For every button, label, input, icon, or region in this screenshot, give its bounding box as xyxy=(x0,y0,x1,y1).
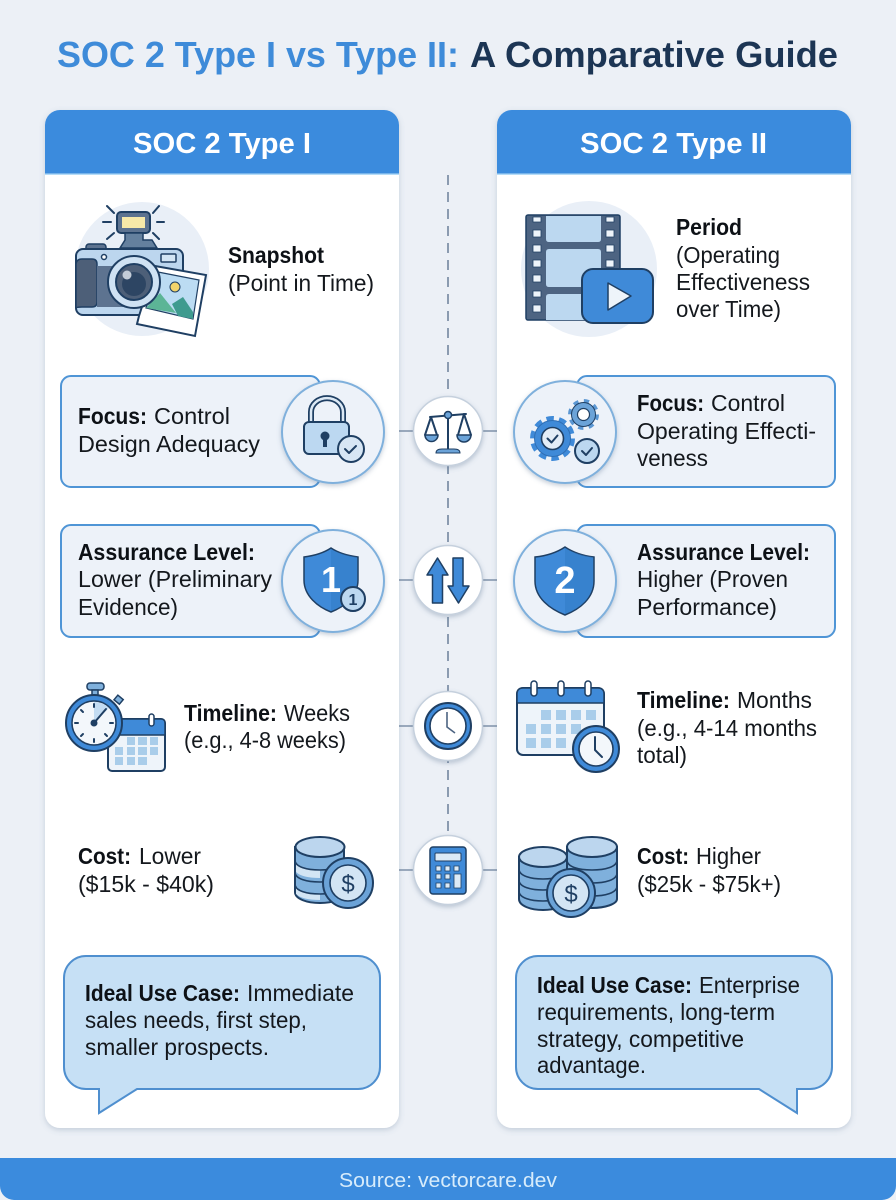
text: period: over Time) xyxy=(676,296,781,322)
footer bar: Source: vectorcare.dev xyxy=(339,1170,557,1192)
callout: ideal use case Type II: requirements, long-term xyxy=(537,999,775,1025)
title: A Comparative Guide xyxy=(470,34,838,75)
icon: coin stack: $ xyxy=(341,871,355,898)
text: timeline Type I: Timeline: xyxy=(184,700,277,726)
text: cost Type I: Cost: xyxy=(78,843,131,869)
callout: ideal use case Type II: Ideal Use Case: xyxy=(537,972,692,998)
card: assurance Type II: Performance) xyxy=(637,594,777,620)
card: assurance Type I: Evidence) xyxy=(78,594,178,620)
card: assurance Type I xyxy=(61,525,384,637)
text: timeline Type I xyxy=(184,700,350,753)
center icon: clock xyxy=(414,692,482,760)
text: cost Type II xyxy=(637,843,781,897)
text: cost Type II: ($25k - $75k+) xyxy=(637,871,781,897)
card: assurance Type I: Assurance Level: xyxy=(78,539,255,565)
callout: ideal use case Type I: smaller prospects. xyxy=(85,1034,269,1060)
icon: shield 1 xyxy=(304,548,365,612)
text: timeline Type II: (e.g., 4-14 months xyxy=(637,715,817,741)
card: focus Type I xyxy=(61,376,384,487)
icon: calendar with clock xyxy=(517,681,619,772)
footer bar xyxy=(0,1158,896,1200)
header: Type II xyxy=(497,110,851,175)
card: focus Type II xyxy=(514,376,835,487)
text: cost Type II: Cost: xyxy=(637,843,689,869)
callout: ideal use case Type II: advantage. xyxy=(537,1052,646,1078)
text: cost Type II: Higher xyxy=(696,843,761,869)
icon: stopwatch and calendar xyxy=(66,683,165,771)
callout: ideal use case Type I: sales needs, first step, xyxy=(85,1007,307,1033)
card: focus Type II: veness xyxy=(637,445,708,471)
text: snapshot: (Point in Time) xyxy=(228,270,374,296)
text: timeline Type II xyxy=(637,687,817,768)
callout: ideal use case Type I: Ideal Use Case: xyxy=(85,980,240,1006)
callout: ideal use case Type II xyxy=(516,956,832,1113)
icon: shield 2: 2 xyxy=(554,560,576,602)
text: period xyxy=(676,214,810,322)
card: assurance Type II xyxy=(514,525,835,637)
text: timeline Type II: total) xyxy=(637,742,687,768)
icon: shield 2 xyxy=(535,547,594,615)
callout: ideal use case Type I: Immediate xyxy=(247,980,354,1006)
card: assurance Type I: Lower (Preliminary xyxy=(78,566,273,592)
icon: padlock xyxy=(304,398,364,462)
text: snapshot xyxy=(228,242,374,296)
title xyxy=(57,34,838,75)
text: timeline Type I: Weeks xyxy=(284,700,350,726)
card: focus Type I: Control xyxy=(154,403,230,429)
text: period: Period xyxy=(676,214,742,240)
card: focus Type I: Focus: xyxy=(78,403,147,429)
text: cost Type I: Lower xyxy=(139,843,201,869)
icon: shield 1: 1 xyxy=(349,592,358,609)
text: cost Type I: ($15k - $40k) xyxy=(78,871,214,897)
text: snapshot: Snapshot xyxy=(228,242,324,268)
center icon: calculator xyxy=(414,836,482,904)
center icon: up and down arrows xyxy=(414,546,482,614)
card: assurance Type II: Assurance Level: xyxy=(637,539,810,565)
header: Type I xyxy=(45,110,399,175)
card: focus Type I: Design Adequacy xyxy=(78,431,261,457)
header: Type II: SOC 2 Type II xyxy=(580,128,767,160)
center icon: balance scale xyxy=(414,396,482,466)
icon: camera and photo xyxy=(75,202,209,336)
icon: gears xyxy=(534,402,599,463)
icon: coin stacks xyxy=(519,837,617,917)
card: focus Type II: Control xyxy=(711,390,785,416)
text: timeline Type II: Timeline: xyxy=(637,687,730,713)
central divider with connectors xyxy=(399,175,497,870)
callout: ideal use case Type II: strategy, competitive xyxy=(537,1026,744,1052)
text: timeline Type I: (e.g., 4-8 weeks) xyxy=(184,727,346,753)
callout: ideal use case Type II: Enterprise xyxy=(699,972,800,998)
icon: coin stack xyxy=(295,837,373,908)
card: assurance Type II: Higher (Proven xyxy=(637,566,788,592)
panel: SOC 2 Type II xyxy=(497,110,851,1128)
text: cost Type I xyxy=(78,843,214,897)
text: period: Effectiveness xyxy=(676,269,810,295)
card: focus Type II: Focus: xyxy=(637,390,704,416)
card: focus Type II: Operating Effecti- xyxy=(637,418,816,444)
icon: shield 1: 1 xyxy=(321,559,341,600)
callout: ideal use case Type I xyxy=(64,956,380,1113)
icon: film strip with play button xyxy=(521,201,657,337)
text: timeline Type II: Months xyxy=(737,687,812,713)
panel: SOC 2 Type I xyxy=(45,110,399,1128)
title: SOC 2 Type I vs Type II: xyxy=(57,34,459,75)
icon: coin stacks: $ xyxy=(564,881,578,908)
header: Type I: SOC 2 Type I xyxy=(133,128,311,160)
text: period: (Operating xyxy=(676,242,780,268)
